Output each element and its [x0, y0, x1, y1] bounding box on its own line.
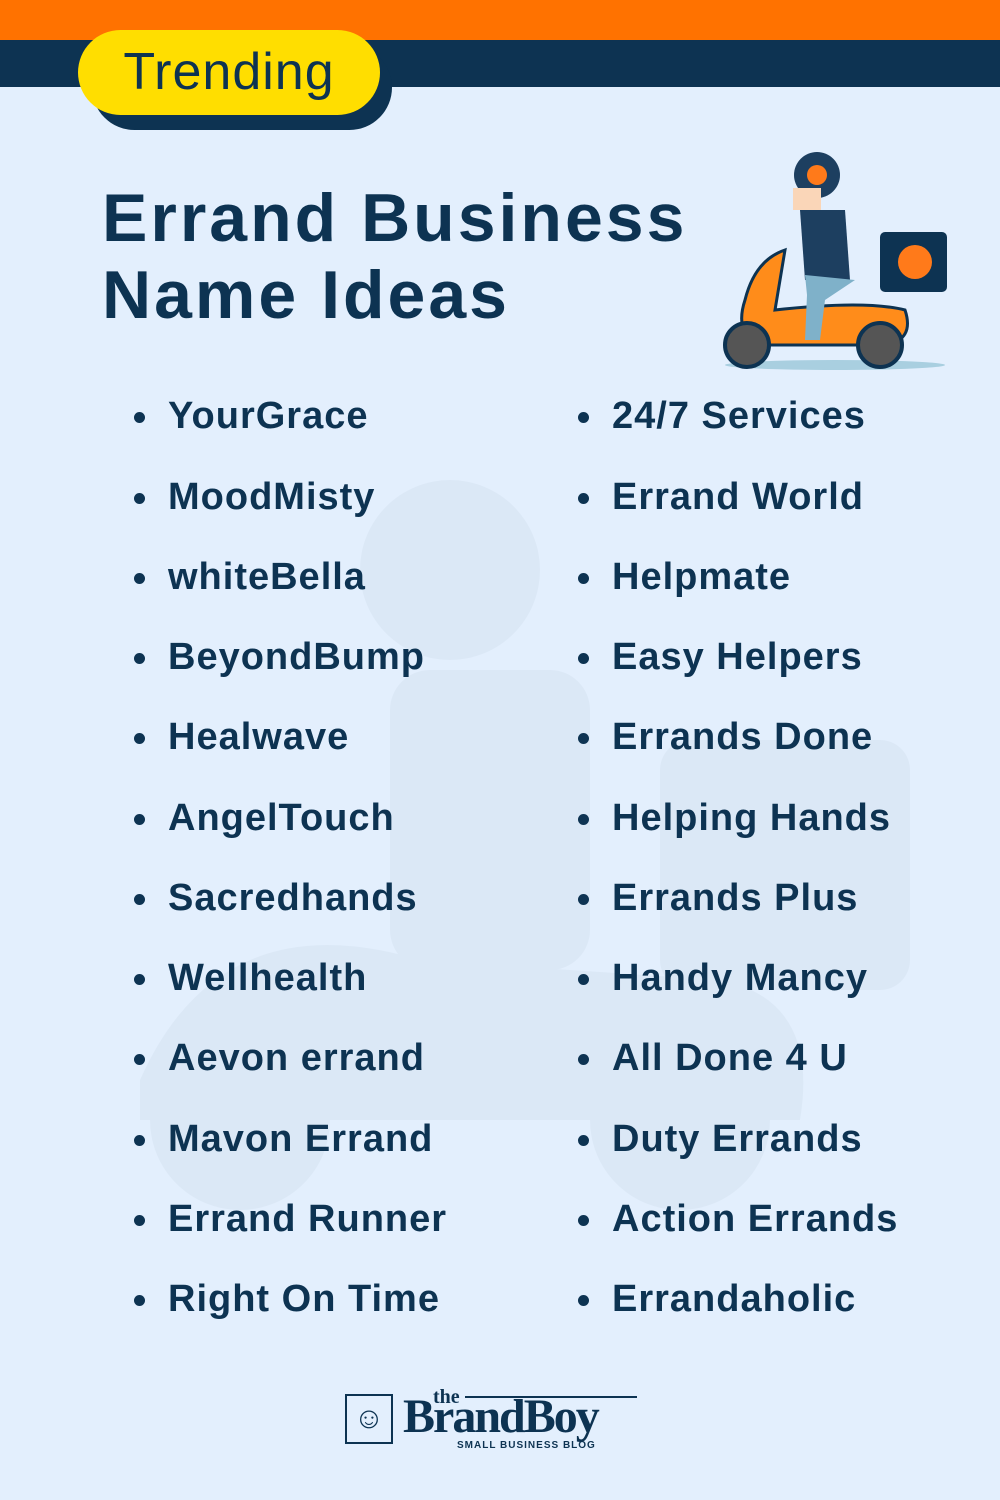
list: left column: Right On Time [168, 1278, 440, 1320]
top orange bar [0, 0, 1000, 40]
icon: boy face [345, 1394, 393, 1444]
title: Errand Business [102, 180, 687, 256]
title: Name Ideas [102, 257, 510, 333]
list: right column: Helpmate [612, 556, 791, 598]
list: right column: All Done 4 U [612, 1037, 848, 1079]
list: left column: Healwave [168, 716, 349, 758]
list: left column: Wellhealth [168, 957, 367, 999]
list: right column: Duty Errands [612, 1118, 863, 1160]
list: right column: Action Errands [612, 1198, 898, 1240]
title [102, 180, 687, 333]
list: left column: whiteBella [168, 556, 366, 598]
list: right column [578, 395, 898, 1320]
list: left column: Mavon Errand [168, 1118, 433, 1160]
list: right column: Easy Helpers [612, 636, 863, 678]
logo: theBrandBoy: the [433, 1386, 460, 1408]
list: left column [134, 395, 447, 1320]
list: right column: 24/7 Services [612, 395, 866, 437]
list: right column: Handy Mancy [612, 957, 868, 999]
list: left column: Errand Runner [168, 1198, 447, 1240]
list: right column: Errands Plus [612, 877, 858, 919]
icon: scooter rider [723, 152, 947, 370]
navy header bar [0, 40, 1000, 87]
logo: theBrandBoy: SMALL BUSINESS BLOG [457, 1440, 596, 1451]
list: right column: Errands Done [612, 716, 873, 758]
list: left column: Aevon errand [168, 1037, 425, 1079]
watermark rider [120, 480, 920, 1210]
logo: theBrandBoy [345, 1386, 637, 1451]
icon: boy face: ☺ [354, 1402, 384, 1435]
list: right column: Errandaholic [612, 1278, 856, 1320]
list: left column: BeyondBump [168, 636, 425, 678]
list: right column: Errand World [612, 476, 864, 518]
badge: Trending [78, 30, 392, 130]
badge: Trending: Trending [123, 43, 335, 101]
list: left column: AngelTouch [168, 797, 395, 839]
list: left column: Sacredhands [168, 877, 418, 919]
list: left column: YourGrace [168, 395, 368, 437]
logo: theBrandBoy: BrandBoy [403, 1390, 598, 1443]
list: left column: MoodMisty [168, 476, 375, 518]
list: right column: Helping Hands [612, 797, 891, 839]
